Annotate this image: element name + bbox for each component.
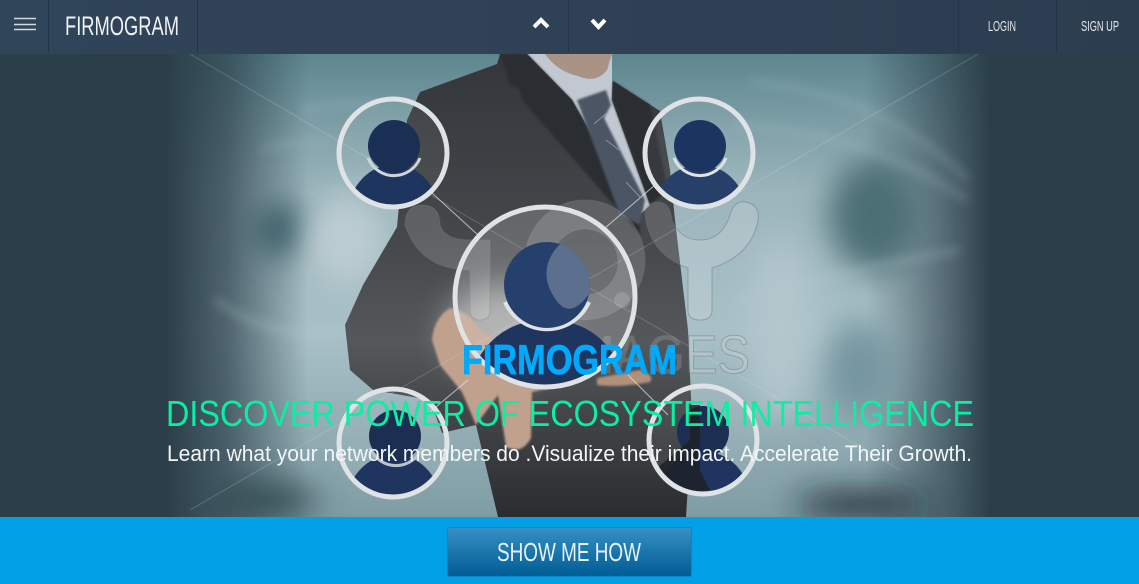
hand glow (445, 285, 565, 375)
node: top left (339, 99, 447, 210)
people nodes (339, 99, 757, 497)
suit jacket (345, 54, 692, 517)
icon: menu (14, 18, 36, 30)
logo: FIRMOGRAM (65, 11, 179, 41)
button (448, 528, 692, 576)
icon: chevron up (534, 20, 548, 27)
neck and chin (545, 54, 612, 79)
businessman (345, 54, 692, 517)
thumb (597, 370, 651, 386)
hero photo (180, 54, 982, 517)
tagline: DISCOVER POWER OF ECOSYSTEM INTELLIGENCE (166, 393, 974, 434)
headline: FIRMOGRAM (462, 336, 677, 383)
network lines (190, 54, 978, 510)
shirt (527, 54, 650, 215)
subheading: Learn what your network members do .Visualize their impact. Accelerate Their Growth. (167, 441, 972, 466)
node connectors (430, 185, 668, 415)
button: SHOW ME HOW (497, 537, 641, 567)
tie (577, 90, 645, 225)
icon: chevron down (592, 20, 605, 27)
node: centre (455, 207, 635, 390)
lapels (500, 54, 640, 235)
hand (432, 308, 565, 450)
node: top right (645, 99, 753, 210)
login link: LOGIN (988, 18, 1016, 35)
tie stripes (594, 112, 640, 197)
call to action band (0, 517, 1139, 584)
blurred office background (150, 54, 1020, 517)
watermark (405, 200, 758, 320)
top navigation bar (0, 0, 1139, 54)
node: bottom right (649, 386, 757, 494)
watermark text: IMAGES (560, 325, 750, 385)
node: bottom left (339, 389, 447, 497)
